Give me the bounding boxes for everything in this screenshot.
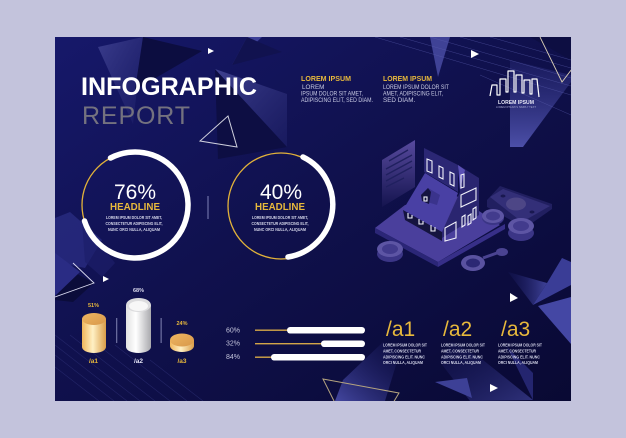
donut chart: 40%: HEADLINE [255, 202, 305, 213]
donut chart: 76%: HEADLINE [110, 202, 160, 213]
text column: /a3: AMET, CONSECTETUR [498, 348, 537, 354]
text column: /a1: /a1 [386, 318, 415, 341]
progress bars [226, 327, 365, 361]
text column: /a3: ORCI NULLA, ALIQUAM [498, 360, 538, 365]
text column: /a2: ORCI NULLA, ALIQUAM [441, 360, 481, 365]
text block: lorem ipsum one: ADIPISCING ELIT, SED DIAM. [301, 97, 373, 104]
platform [375, 195, 505, 267]
text column: /a1: LOREM IPSUM DOLOR SIT [383, 342, 427, 348]
text column: /a2: AMET, CONSECTETUR [441, 348, 480, 354]
bar: 84%: 84% [226, 354, 240, 361]
infographic canvas [55, 37, 571, 401]
cylinder /a1: 51% [88, 303, 99, 309]
cylinder /a1 [82, 303, 106, 365]
text block: lorem ipsum one [301, 76, 373, 104]
divider [208, 196, 209, 219]
cylinder /a2 [126, 288, 151, 365]
background facets and lines [55, 37, 572, 403]
donut chart: 40%: CONSECTETUR ADIPISCING ELIT, [252, 221, 308, 226]
donut chart: 76%: NUNC ORCI NULLA, ALIQUAM [108, 227, 160, 232]
title: REPORT [82, 102, 190, 130]
donut chart: 76% [82, 152, 188, 258]
cylinder /a3: /a3 [177, 358, 187, 365]
donut chart: 40%: 40% [260, 181, 302, 204]
cylinder /a1: /a1 [89, 358, 98, 365]
donut chart: 76%: LOREM IPSUM DOLOR SIT AMET, [106, 215, 162, 220]
text column: /a1 [383, 318, 427, 365]
text column: /a2 [441, 318, 485, 365]
donut chart: 40%: NUNC ORCI NULLA, ALIQUAM [254, 227, 306, 232]
report card background [55, 37, 571, 401]
icon: coin stacks [377, 209, 534, 262]
cylinder /a3: 24% [176, 321, 188, 327]
title [81, 73, 257, 130]
text column: /a1: ORCI NULLA, ALIQUAM [383, 360, 423, 365]
donut chart: 40%: LOREM IPSUM DOLOR SIT AMET, [252, 215, 308, 220]
text block: lorem ipsum two: LOREM IPSUM DOLOR SIT [383, 84, 449, 91]
icon: magnifier and key [461, 248, 508, 271]
bar: 32%: 32% [226, 340, 240, 348]
text column: /a1: ADIPISCING ELIT. NUNC [383, 354, 426, 360]
text block: lorem ipsum one: LOREM IPSUM [301, 76, 351, 83]
text block: lorem ipsum two: AMET, ADIPISCING ELIT, [383, 90, 443, 98]
cylinder /a2: 68% [133, 288, 144, 294]
text column: /a3: ADIPISCING ELIT. NUNC [498, 354, 541, 360]
donut chart: 76%: CONSECTETUR ADIPISCING ELIT, [106, 221, 162, 226]
text column: /a2: ADIPISCING ELIT. NUNC [441, 354, 484, 360]
text column: /a3: /a3 [501, 318, 530, 341]
icon: banknotes [487, 186, 552, 228]
logo: city skyline: LOREM IPSUM [498, 100, 534, 106]
text column: /a3: LOREM IPSUM DOLOR SIT [498, 342, 542, 348]
text column: /a2: /a2 [443, 318, 472, 341]
isometric house illustration [375, 140, 552, 271]
text column: /a1: AMET, CONSECTETUR [383, 348, 422, 354]
icon: house [403, 148, 479, 241]
donut chart: 40% [228, 153, 334, 259]
text column: /a2: LOREM IPSUM DOLOR SIT [441, 342, 485, 348]
text block: lorem ipsum two: LOREM IPSUM [383, 76, 432, 83]
cylinder /a3 [170, 321, 194, 365]
logo: city skyline: LOREM IPSUM IS SIMPLY TEXT [496, 106, 537, 109]
text block: lorem ipsum two: SED DIAM. [383, 97, 415, 104]
title: INFOGRAPHIC [81, 73, 257, 101]
logo: city skyline [490, 71, 539, 109]
text block: lorem ipsum two [383, 76, 449, 104]
donut chart: 76%: 76% [114, 181, 156, 204]
text block: lorem ipsum one: LOREM [302, 84, 324, 91]
bar chart: 3D cylinders [82, 288, 194, 365]
cylinder /a2: /a2 [134, 358, 143, 365]
icon: document [382, 140, 415, 207]
text column: /a3 [498, 318, 542, 365]
bar: 60%: 60% [226, 328, 240, 334]
text block: lorem ipsum one: IPSUM DOLOR SIT AMET, [301, 90, 363, 98]
